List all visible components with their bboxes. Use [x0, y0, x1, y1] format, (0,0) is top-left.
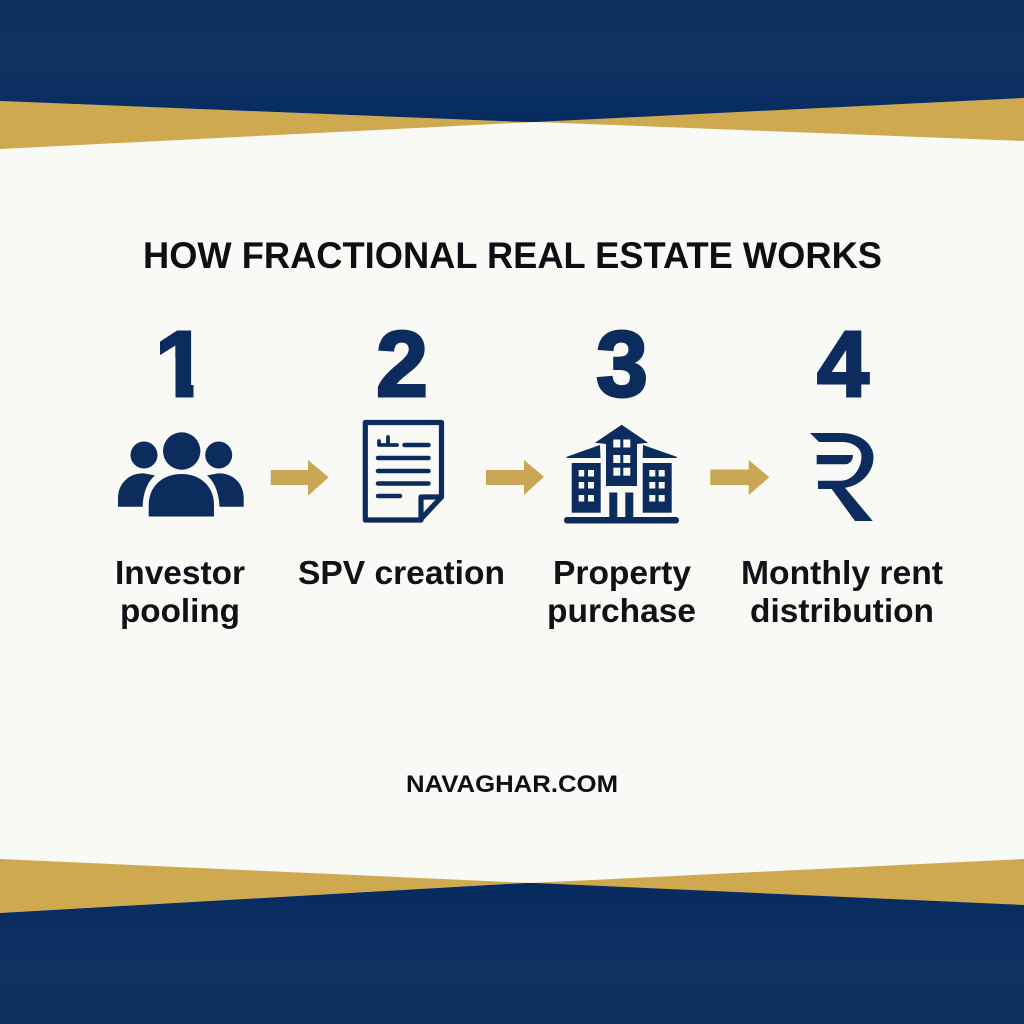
icon: group of people [118, 432, 244, 516]
label: Property [553, 554, 692, 591]
step 3: property purchase [547, 312, 696, 629]
number 3: 3 [596, 312, 648, 416]
website footer: NAVAGHAR.COM [406, 771, 618, 798]
title: HOW FRACTIONAL REAL ESTATE WORKS [143, 235, 882, 276]
icon: building [564, 425, 679, 524]
label: pooling [120, 592, 240, 629]
label: Monthly rent [741, 554, 943, 591]
label: distribution [750, 592, 934, 629]
step 2: SPV creation [298, 312, 505, 591]
number 1: 1 [155, 312, 207, 416]
top banner [0, 0, 1024, 149]
bottom banner [0, 859, 1024, 1024]
number 4: 4 [817, 312, 869, 416]
step 1: investor pooling [115, 312, 245, 629]
label: purchase [547, 592, 696, 629]
number 2: 2 [376, 312, 428, 416]
label: SPV creation [298, 554, 505, 591]
step 4: monthly rent distribution [741, 312, 943, 629]
label: Investor [115, 554, 245, 591]
icon: rupee symbol [810, 433, 874, 521]
icon: document [365, 422, 442, 520]
arrow 3 [710, 460, 769, 495]
arrow 2 [486, 460, 544, 495]
arrow 1 [271, 460, 329, 496]
